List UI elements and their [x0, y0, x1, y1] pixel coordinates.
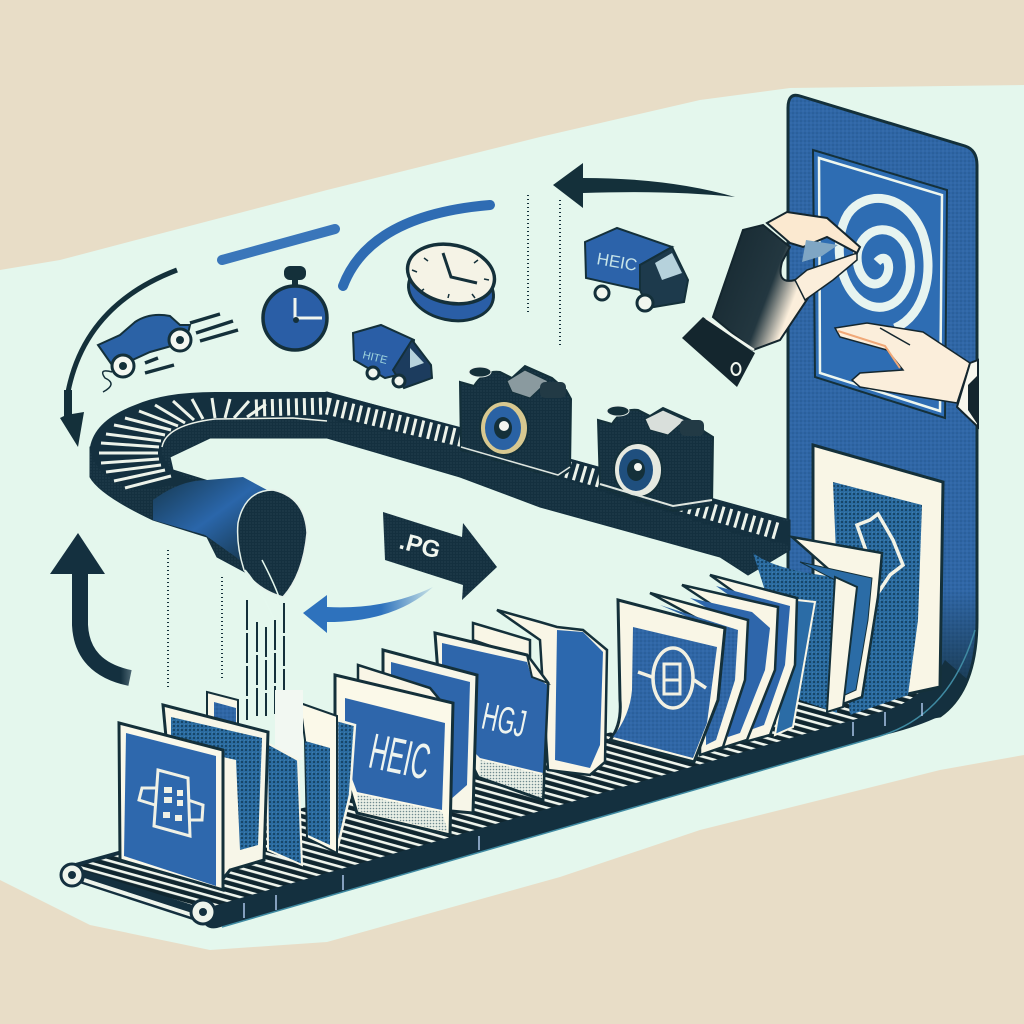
left up arrow	[50, 533, 130, 678]
glove cuff	[682, 317, 755, 387]
document: front sheet with icon	[119, 723, 223, 890]
left dotted guide	[527, 195, 529, 313]
small delivery truck	[353, 325, 432, 388]
spiral	[839, 198, 928, 328]
rail	[90, 392, 790, 575]
large delivery truck	[585, 228, 688, 311]
center dotted guide	[559, 200, 561, 347]
star emblem	[857, 514, 903, 590]
small delivery truck: HITE	[361, 349, 388, 367]
document: HGJ sheet	[435, 633, 548, 800]
lower dotted guide two	[221, 577, 223, 678]
blue left arrow	[303, 587, 433, 633]
sleeve	[957, 360, 978, 427]
document: folded blue sheet	[473, 610, 607, 775]
slats	[99, 398, 266, 488]
right hand	[835, 323, 978, 427]
emblem	[638, 648, 706, 708]
document stack: middle sheets	[650, 575, 797, 755]
document: HEIC sheet: HEIC	[365, 723, 435, 790]
blue curved arc	[343, 205, 490, 286]
document: second sheet	[163, 705, 268, 880]
document: emblem sheet	[610, 600, 725, 762]
curved black arrow top left	[60, 270, 177, 447]
wall clock icon	[402, 236, 500, 328]
document: HEIC sheet	[335, 675, 453, 835]
bottom conveyor belt surface	[68, 655, 945, 910]
rollers	[61, 852, 215, 925]
top black arrow	[553, 163, 735, 208]
top surface	[90, 392, 790, 545]
document: stippled sheet	[267, 743, 302, 865]
spiral artwork frame	[813, 150, 947, 418]
large delivery truck: HEIC	[595, 249, 639, 275]
white stream gap	[275, 690, 303, 760]
car icon	[98, 314, 238, 392]
upper conveyor belt	[90, 392, 790, 575]
document: sheet behind HEIC	[358, 650, 477, 813]
left hand in black glove	[682, 212, 860, 387]
grid icon	[139, 770, 203, 836]
document: back emblem panel	[813, 445, 943, 715]
camera one	[460, 366, 571, 478]
document: small back sheet	[207, 692, 238, 730]
lower dotted guide one	[167, 550, 169, 687]
dark .PG arrow label: .PG	[396, 528, 443, 564]
panel corner shading	[920, 590, 977, 716]
dark .PG arrow label	[383, 512, 497, 600]
camera two	[598, 406, 713, 511]
document: slim sheets	[300, 703, 355, 853]
stopwatch icon	[263, 266, 327, 350]
blue speed bar	[222, 229, 335, 260]
document stack: right curled sheets	[753, 537, 882, 735]
document: HGJ sheet: HGJ	[478, 696, 530, 746]
funnel spout	[153, 477, 307, 622]
falling stream lines	[247, 600, 284, 720]
bottom conveyor front rail	[203, 630, 975, 928]
tall blue panel	[788, 95, 977, 740]
